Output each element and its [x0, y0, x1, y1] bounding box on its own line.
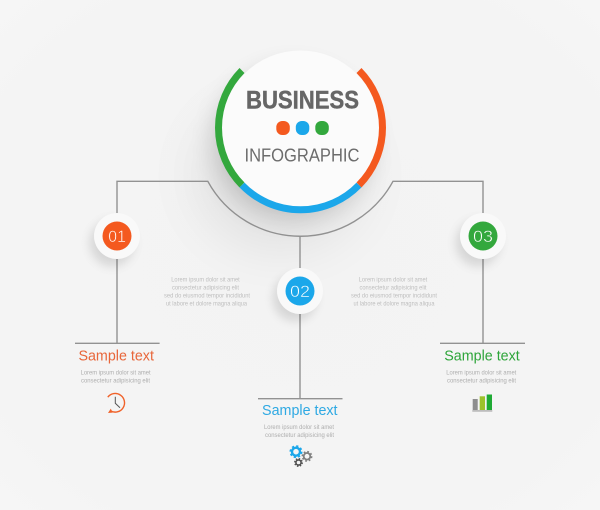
marker 01: 01: [108, 227, 126, 246]
item 02 text: consectetur adipisicing elit: [265, 432, 334, 439]
item 02 text: Sample text: [262, 402, 338, 419]
item 03 text: Sample text: [444, 348, 521, 365]
marker 02: 02: [290, 282, 310, 301]
center-left paragraph: ut labore et dolore magna aliqua: [166, 301, 248, 308]
item 01 text: consectetur adipisicing elit: [81, 378, 150, 384]
center-right paragraph: Lorem ipsum dolor sit amet: [359, 277, 428, 284]
main title badge: [219, 50, 382, 210]
grey gear: [302, 452, 312, 461]
item 02 text: Lorem ipsum dolor sit amet: [264, 424, 334, 431]
item 01 text: [78, 348, 155, 384]
marker 01: [90, 213, 140, 266]
icon: gears: [290, 446, 312, 466]
icon: bar chart: [472, 394, 492, 412]
wide soft shadow: [195, 100, 365, 250]
marker 02: [273, 268, 323, 321]
center-left paragraph: [164, 277, 250, 308]
icon: clock: [108, 393, 125, 413]
blue gear: [290, 446, 302, 457]
dark gear: [295, 459, 302, 466]
heading: business: BUSINESS: [246, 88, 359, 114]
ring: blue arc: [242, 185, 359, 210]
white disc: [221, 50, 380, 210]
item 03 text: Lorem ipsum dolor sit amet: [446, 370, 517, 376]
center-left paragraph: consectetur adipisicing elit: [172, 285, 239, 292]
marker 03: 03: [473, 227, 493, 246]
item 01 text: Sample text: [78, 348, 155, 365]
main circle shadow: [213, 66, 373, 218]
item 03 text: [444, 348, 521, 384]
center-right paragraph: ut labore et dolore magna aliqua: [354, 301, 435, 308]
ring: green arc: [219, 70, 242, 185]
center-left paragraph: sed do eiusmod tempor incididunt: [164, 293, 250, 300]
center-right paragraph: consectetur adipisicing elit: [360, 285, 427, 292]
center-right paragraph: sed do eiusmod tempor incididunt: [351, 293, 437, 300]
item 02 text: [262, 402, 338, 439]
center-right paragraph: [351, 277, 437, 308]
center-left paragraph: Lorem ipsum dolor sit amet: [171, 277, 240, 284]
marker 03: [456, 213, 506, 266]
connector lines: [75, 181, 525, 399]
item 03 text: consectetur adipisicing elit: [447, 378, 516, 384]
heading: infographic: INFOGRAPHIC: [244, 146, 360, 166]
three colored dots: [276, 121, 329, 135]
ring: orange arc: [359, 70, 382, 185]
item 01 text: Lorem ipsum dolor sit amet: [81, 370, 151, 376]
